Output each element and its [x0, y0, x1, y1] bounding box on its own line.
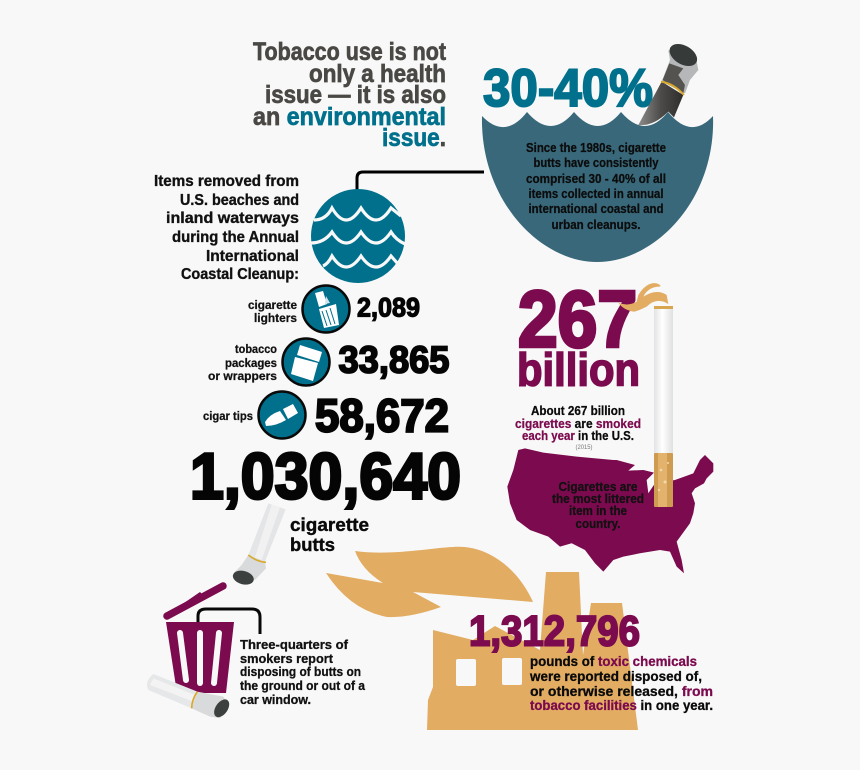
text: most littered: Cigarettes are	[558, 480, 638, 494]
icon: waves circle	[311, 189, 405, 283]
number: 1,312,796: 1,312,796	[469, 608, 640, 656]
row: tobacco packages	[208, 338, 450, 386]
number: 267 billion	[517, 274, 640, 396]
text: pounds of toxic chemicals: were reported disposed of,	[529, 668, 702, 684]
text: about 267 billion: cigarettes are smoked	[515, 417, 641, 431]
label: cigar tips	[203, 410, 253, 423]
icon: falling cigarette butt	[231, 503, 286, 587]
text: three-quarters: Three-quarters of	[240, 637, 349, 652]
icon: cigarette with smoke	[618, 283, 673, 507]
title: only a health	[309, 60, 446, 88]
text: items removed: U.S. beaches and	[180, 192, 299, 209]
title: Tobacco use is not	[253, 38, 447, 66]
text: three-quarters: disposing of butts on	[240, 664, 361, 679]
number: 267 billion: 267	[518, 274, 637, 364]
text: pounds of toxic chemicals: tobacco facilities in one year.	[530, 697, 713, 713]
text: items removed	[154, 173, 299, 283]
icon: factory smoke	[326, 547, 533, 617]
number: 2,089	[357, 292, 420, 322]
icon: package	[282, 338, 330, 386]
heading: 30-40%: 30-40%	[483, 59, 653, 118]
row: cigar tips	[203, 390, 449, 442]
text: three-quarters: the ground or out of a	[240, 678, 366, 693]
text: three-quarters	[240, 637, 366, 707]
icon: trash can	[147, 586, 260, 720]
map: United States	[507, 448, 713, 573]
label: cigarette butts	[290, 514, 369, 555]
number: 1,030,640: 1,030,640	[190, 440, 461, 512]
text: most littered: country.	[576, 517, 620, 531]
text: items removed: International	[206, 248, 299, 265]
text: three-quarters: car window.	[240, 692, 311, 707]
text: since the 1980s: urban cleanups.	[552, 218, 640, 232]
text: pounds of toxic chemicals	[529, 653, 713, 713]
icon: cigarette butt in water	[638, 39, 701, 125]
text: items removed: during the Annual	[172, 229, 299, 246]
label: cigarette	[248, 299, 298, 312]
title: issue — it is also	[265, 81, 446, 109]
text: pounds of toxic chemicals: or otherwise released, from	[530, 683, 713, 699]
text: items removed: Coastal Cleanup:	[181, 266, 299, 283]
text: since the 1980s: Since the 1980s, cigarette	[526, 141, 666, 155]
text: most littered: item in the	[569, 504, 627, 518]
number: 267 billion: billion	[517, 344, 640, 396]
label: cigarette butts: butts	[290, 534, 335, 555]
text: since the 1980s: butts have consistently	[534, 156, 658, 170]
label	[248, 299, 298, 325]
title: issue.	[382, 124, 446, 152]
connector line: ocean to waves icon	[357, 172, 484, 192]
label: packages	[225, 357, 277, 370]
title	[253, 38, 447, 152]
text: three-quarters: smokers report	[240, 651, 334, 666]
text: since the 1980s	[526, 141, 666, 232]
icon: cigar tip	[258, 392, 306, 438]
text: since the 1980s: comprised 30 - 40% of all	[526, 172, 666, 186]
label	[208, 343, 277, 383]
number: 58,672	[315, 390, 449, 442]
panel: 30-40% semicircle	[482, 59, 713, 262]
title: an environmental	[253, 103, 446, 131]
text: items removed: Items removed from	[154, 173, 299, 190]
label: or wrappers	[208, 370, 277, 383]
text: pounds of toxic chemicals: pounds of toxic chemicals	[530, 653, 697, 669]
text: since the 1980s: international coastal and	[528, 202, 664, 216]
text: most littered	[552, 480, 644, 531]
number: 33,865	[338, 340, 450, 382]
icon: factory	[427, 572, 638, 730]
label: tobacco	[235, 343, 277, 356]
text: since the 1980s: items collected in annual	[528, 187, 664, 201]
row: cigarette lighters	[248, 286, 420, 332]
label: cigarette butts: cigarette	[290, 514, 369, 535]
text: about 267 billion: (2015)	[576, 445, 593, 451]
text: about 267 billion: About 267 billion	[531, 404, 625, 418]
text: most littered: the most littered	[552, 492, 644, 506]
icon: lying cigarette butt	[147, 674, 232, 720]
text: items removed: inland waterways	[166, 210, 299, 227]
label: lighters	[254, 312, 297, 325]
text: about 267 billion	[515, 404, 641, 451]
text: about 267 billion: each year in the U.S.	[522, 429, 634, 443]
icon: lighter	[302, 286, 350, 332]
